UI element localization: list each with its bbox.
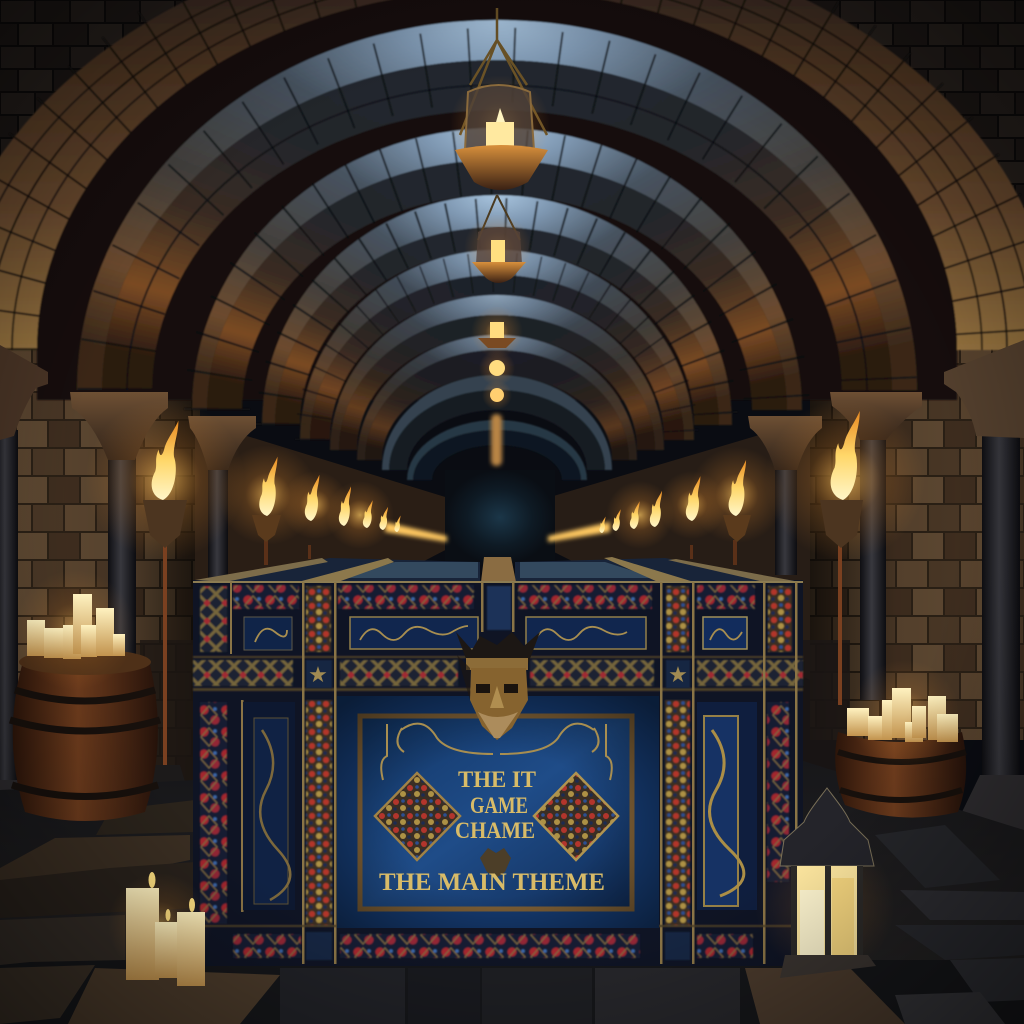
- blue scrollwork panels: [244, 617, 747, 650]
- stone walls: [0, 340, 1024, 810]
- candles: front left: [108, 872, 212, 986]
- plaque text: THE MAIN THEME: [379, 869, 605, 896]
- lantern: floor right: [755, 788, 895, 978]
- gold stars: ★: [308, 663, 328, 688]
- chest lid: [193, 557, 803, 583]
- arch 6: [330, 295, 664, 450]
- column: right near: [830, 392, 922, 700]
- gap between arch 1 and arch 2: [37, 0, 957, 400]
- column: left near: [70, 392, 168, 660]
- arch 5: [300, 250, 694, 440]
- candles on left barrel: [15, 570, 135, 690]
- hanging lantern: second: [464, 195, 532, 283]
- plaque text: THE IT: [458, 767, 536, 792]
- floor stones centre: [280, 968, 740, 1024]
- pillar: foreground right: [944, 340, 1024, 838]
- plaque scrollwork: [381, 724, 612, 780]
- barrel: left: [10, 570, 160, 821]
- middle ornament bands: [193, 656, 803, 691]
- base ornament band: [193, 925, 803, 960]
- floor: [0, 760, 1024, 1024]
- gold stars: ★: [668, 663, 688, 688]
- arch 3: [192, 128, 802, 410]
- hanging lantern: third: [471, 306, 523, 358]
- arch 4: [262, 195, 732, 425]
- column: right second: [748, 416, 822, 575]
- floor stones right: [745, 825, 1024, 1024]
- central plaque: [337, 696, 659, 928]
- hanging lantern: large: [450, 8, 550, 190]
- diamond emblem right: [534, 773, 618, 860]
- torch: right near: [820, 411, 863, 705]
- column: left second: [188, 416, 256, 580]
- arch 2: [77, 20, 917, 390]
- arch 9: [407, 420, 587, 480]
- chest body: [193, 580, 803, 966]
- plaque text: [379, 767, 605, 896]
- arch 7: [357, 335, 637, 460]
- plaque text: CHAME: [455, 818, 535, 843]
- vertical ornament strips: [200, 586, 792, 926]
- plaque text: GAME: [470, 793, 528, 818]
- torches: far left row: [252, 457, 400, 565]
- upper red ornament bands: [233, 585, 755, 609]
- gold stars: [308, 663, 688, 688]
- torch: left near: [143, 421, 187, 785]
- hanging lanterns: far: [479, 350, 515, 466]
- stone arches receding down the tunnel: [0, 0, 1024, 480]
- torch glows: [85, 400, 925, 560]
- gold strip borders: [230, 582, 798, 964]
- candles on right barrel: [847, 660, 960, 770]
- pillar: foreground left: [0, 345, 48, 838]
- arch 8: [382, 375, 612, 470]
- barrel: right: [835, 660, 966, 818]
- small crest: [480, 848, 511, 878]
- lower side panels: [243, 702, 757, 910]
- arch 1: [0, 0, 1024, 350]
- ceiling corners in shadow: [0, 0, 1024, 350]
- crowned mask: [456, 632, 540, 740]
- floor stones left: [0, 800, 280, 1024]
- diamond emblem left: [375, 773, 460, 860]
- light strips along tunnel walls: [385, 522, 610, 542]
- treasure chest: [193, 557, 803, 966]
- torches: far right row: [599, 460, 751, 565]
